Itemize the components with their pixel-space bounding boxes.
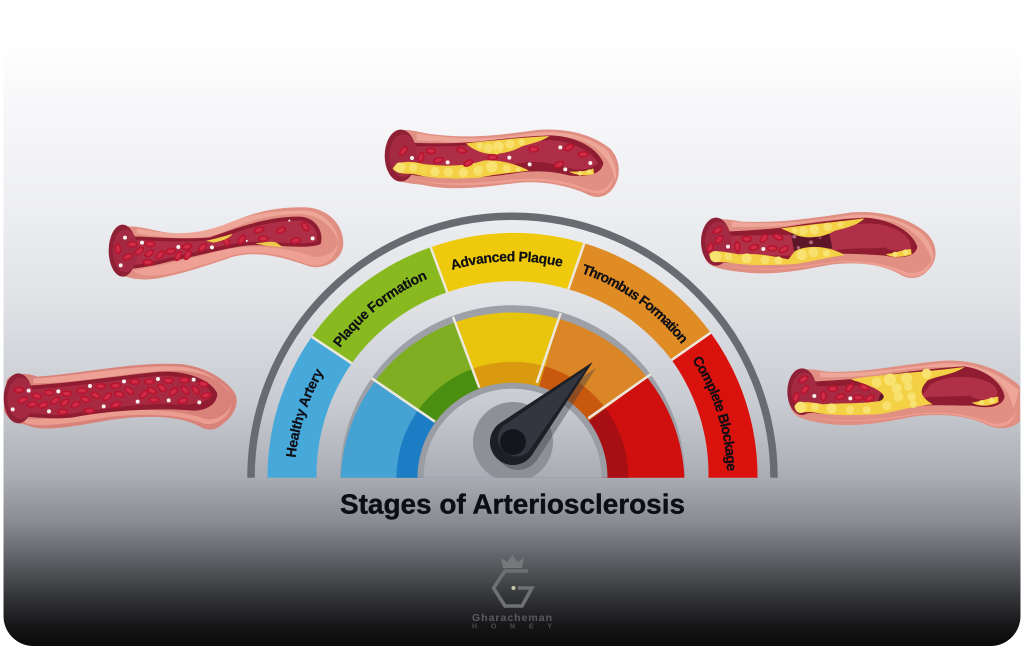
gauge outer arc — [251, 216, 774, 478]
inner gauge segments — [340, 305, 685, 478]
stage labels: Plaque Formation — [332, 272, 428, 348]
vessel: advanced plaque — [385, 129, 619, 197]
vessel: healthy artery — [4, 364, 237, 430]
vessel: thrombus formation — [701, 212, 936, 278]
gauge needle — [490, 362, 596, 470]
stage labels — [286, 251, 734, 471]
logo — [472, 555, 552, 630]
title: Stages of Arteriosclerosis — [340, 488, 685, 520]
stage labels: Complete Blockage — [694, 356, 734, 471]
logo: Gharacheman — [472, 612, 552, 624]
vessel: complete blockage — [787, 360, 1020, 428]
vessel: early narrowing — [109, 207, 343, 279]
stage labels: Thrombus Formation — [584, 264, 686, 344]
stage labels: Advanced Plaque — [452, 251, 562, 270]
stage labels: Healthy Artery — [286, 368, 324, 458]
logo: HONEY — [472, 624, 552, 630]
outer band segments — [267, 233, 758, 478]
